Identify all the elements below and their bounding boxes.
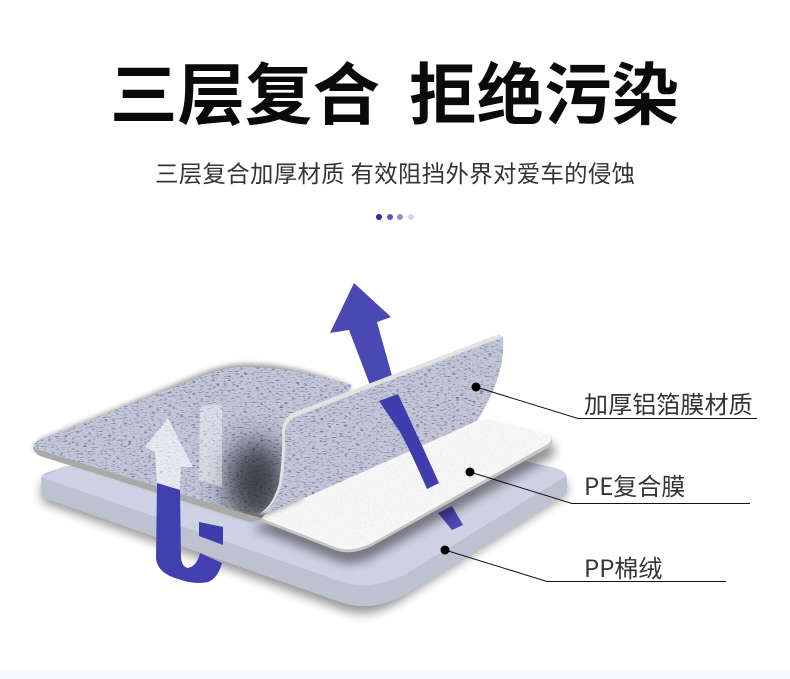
bottom strip <box>0 670 790 679</box>
icon: blue U-turn arrow <box>156 483 223 583</box>
layer: PP cotton <box>41 460 567 613</box>
layered material diagram <box>33 283 567 613</box>
title: 拒绝污染 <box>409 42 679 139</box>
title <box>110 42 679 139</box>
subtitle: 三层复合加厚材质 有效阻挡外界对爱车的侵蚀 <box>155 155 635 189</box>
callout: PP cotton: PP棉绒 <box>584 549 662 584</box>
pagination dots <box>376 214 414 220</box>
callout: PP cotton <box>440 546 726 584</box>
arrow: large upward arrow <box>330 283 392 385</box>
callout: aluminium foil <box>472 382 757 420</box>
icon: white upward arrow <box>145 403 222 490</box>
fold shadow <box>226 440 286 524</box>
layer: aluminium foil, flap <box>253 334 503 517</box>
layer: PE film <box>245 419 554 564</box>
arrow segment: lower diagonal <box>438 506 463 530</box>
callout: PE film <box>466 467 750 504</box>
arrow segment: through foil <box>379 394 439 489</box>
layer: aluminium foil, flat part <box>33 364 352 524</box>
callout: PE film: PE复合膜 <box>584 467 685 502</box>
title: 三层复合 <box>110 42 380 139</box>
callout: aluminium foil: 加厚铝箔膜材质 <box>584 385 753 420</box>
